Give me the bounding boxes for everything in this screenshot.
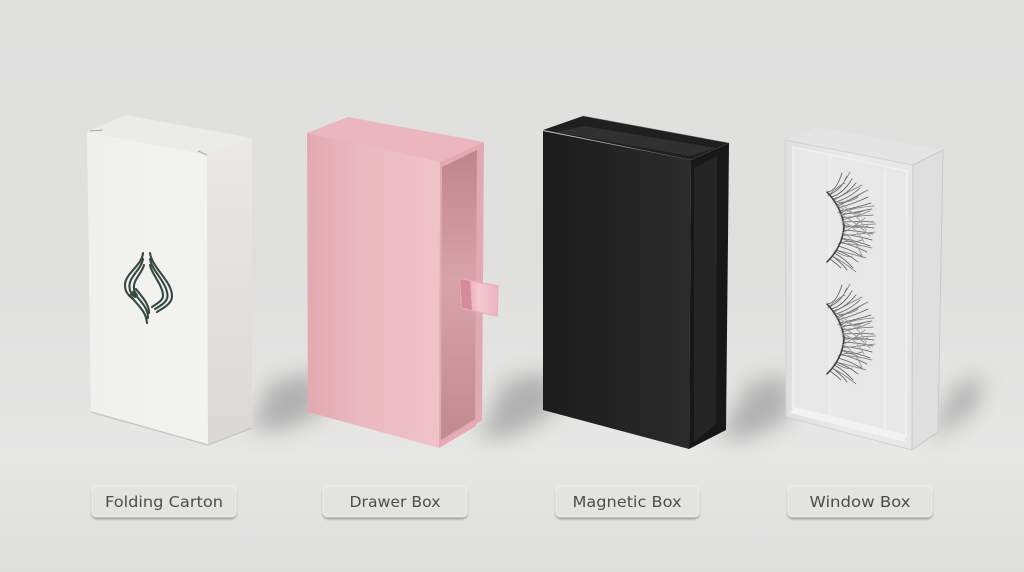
label: Magnetic Box <box>556 486 699 519</box>
carton top flap <box>87 115 252 155</box>
panel: window box <box>785 127 943 450</box>
eyelash bottom <box>827 284 876 384</box>
label: Drawer Box: Drawer Box <box>350 493 441 511</box>
panel: folding carton <box>87 115 252 445</box>
window box side <box>912 150 943 450</box>
carton front face <box>87 132 208 445</box>
window box clear top <box>785 127 943 165</box>
icon: green leaf logo <box>125 253 172 323</box>
label: Window Box <box>788 486 932 519</box>
magnetic box top recess <box>543 116 729 160</box>
drawer top face <box>307 117 484 162</box>
box shadows on the floor <box>250 372 985 440</box>
carton side face <box>207 138 252 445</box>
label: Window Box: Window Box <box>810 493 911 511</box>
label: Folding Carton: Folding Carton <box>105 493 223 511</box>
drawer side face <box>439 142 484 448</box>
label: Folding Carton <box>92 486 236 519</box>
drawer front face <box>307 133 440 448</box>
magnetic box front face <box>543 131 691 449</box>
panel: drawer box <box>307 117 498 448</box>
window box front <box>785 140 913 450</box>
panel: magnetic box <box>543 116 729 449</box>
label: Drawer Box <box>323 486 467 519</box>
magnetic box side face <box>689 143 729 449</box>
pink ribbon pull tab <box>460 279 498 316</box>
eyelash top <box>827 172 876 272</box>
label: Magnetic Box: Magnetic Box <box>572 493 682 511</box>
